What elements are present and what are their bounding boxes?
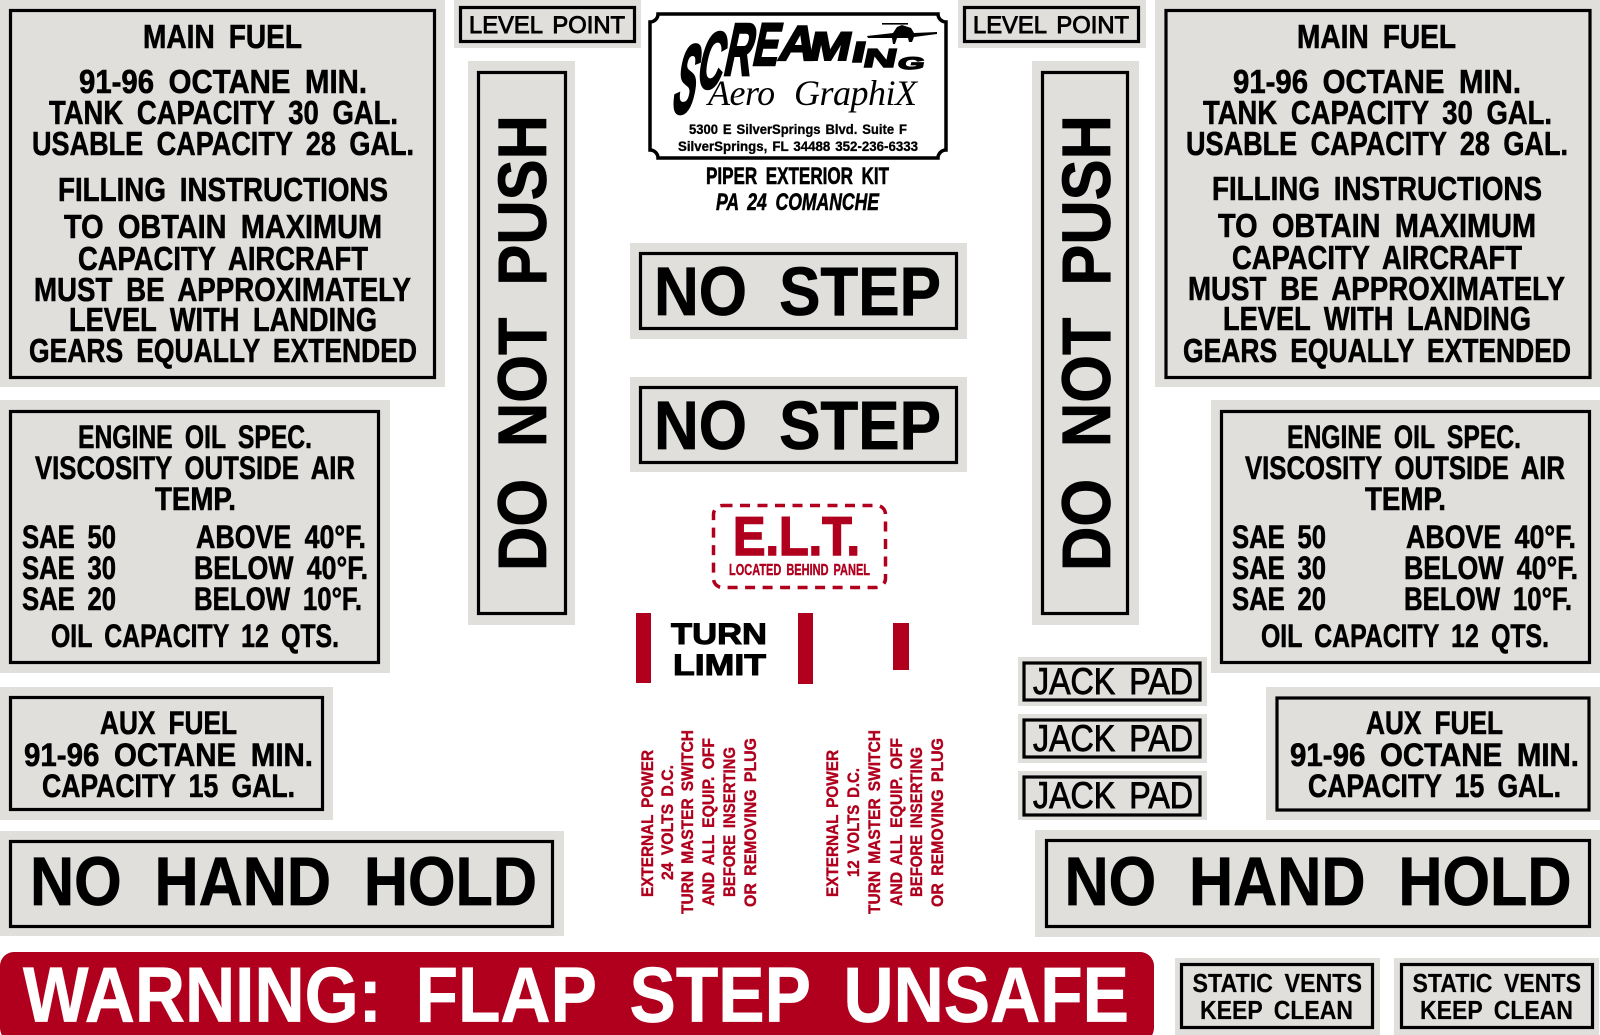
logo wordmark: screaming: M bbox=[805, 24, 856, 69]
heading: aux fuel: AUX FUEL bbox=[1366, 705, 1503, 741]
logo: screaming aero graphix bbox=[650, 8, 946, 158]
red short bar bbox=[893, 623, 909, 670]
placard: static vents 1 bbox=[1175, 958, 1380, 1035]
placard: jack pad 3: JACK PAD bbox=[1033, 775, 1193, 816]
fuel specification lines: 91-96 OCTANE MIN. bbox=[1233, 63, 1521, 100]
panel: main fuel right bbox=[1155, 0, 1600, 387]
logo wordmark: screaming: S bbox=[666, 25, 710, 134]
logo wordmark: screaming: E bbox=[748, 11, 788, 78]
placard: level point left bbox=[454, 0, 641, 48]
heading: engine oil spec: VISCOSITY OUTSIDE AIR bbox=[35, 450, 355, 486]
panel: aux fuel right bbox=[1266, 687, 1600, 820]
viscosity table bbox=[22, 519, 368, 617]
placard: level point right: LEVEL POINT bbox=[973, 12, 1129, 39]
placard: static vents 2: KEEP CLEAN bbox=[1420, 995, 1573, 1025]
external power 12 volts: BEFORE INSERTING bbox=[907, 747, 926, 897]
viscosity table: SAE 20 bbox=[22, 581, 116, 617]
logo frame bbox=[650, 14, 946, 158]
logo wordmark: screaming: C bbox=[691, 16, 735, 106]
placard: do not push left bbox=[468, 61, 575, 625]
placard: do not push left: DO NOT PUSH bbox=[484, 115, 561, 571]
logo wordmark: screaming bbox=[666, 8, 927, 134]
icon: airplane bbox=[867, 23, 937, 44]
logo wordmark: screaming: I bbox=[849, 36, 869, 68]
filling instruction lines: CAPACITY AIRCRAFT bbox=[78, 240, 368, 277]
filling instruction lines bbox=[1183, 207, 1571, 369]
logo wordmark: screaming: R bbox=[719, 8, 764, 91]
external power 12 volts bbox=[823, 730, 947, 914]
filling instruction lines: LEVEL WITH LANDING bbox=[1223, 300, 1531, 337]
external power 24 volts: AND ALL EQUIP. OFF bbox=[699, 738, 718, 906]
viscosity table: SAE 30 bbox=[1232, 550, 1326, 586]
fuel specification lines: TANK CAPACITY 30 GAL. bbox=[49, 94, 398, 131]
turn limit marker bbox=[636, 613, 813, 684]
filling instruction lines: MUST BE APPROXIMATELY bbox=[34, 271, 411, 308]
turn limit text: TURN bbox=[671, 618, 767, 651]
filling instruction lines: TO OBTAIN MAXIMUM bbox=[1218, 207, 1536, 244]
heading: filling instructions: FILLING INSTRUCTIONS bbox=[1212, 170, 1542, 207]
heading: engine oil spec: TEMP. bbox=[155, 481, 236, 517]
placard: no hand hold left bbox=[0, 831, 564, 936]
placard: no hand hold right bbox=[1035, 830, 1600, 937]
placard: no step lower: NO STEP bbox=[654, 387, 941, 464]
heading: main fuel: MAIN FUEL bbox=[143, 18, 302, 55]
placard: static vents 2 bbox=[1394, 958, 1599, 1035]
aux fuel lines bbox=[1290, 737, 1579, 804]
viscosity table: BELOW 10°F. bbox=[194, 581, 362, 617]
filling instruction lines: LEVEL WITH LANDING bbox=[69, 301, 377, 338]
external power 12 volts: AND ALL EQUIP. OFF bbox=[887, 738, 906, 906]
placard: level point left: LEVEL POINT bbox=[469, 12, 625, 39]
panel: engine oil left bbox=[0, 400, 390, 673]
placard: static vents 2: STATIC VENTS bbox=[1412, 968, 1581, 998]
elt letters: E.L.T. bbox=[733, 505, 860, 567]
external power 12 volts: 12 VOLTS D.C. bbox=[844, 768, 863, 877]
placard: static vents 1: KEEP CLEAN bbox=[1200, 995, 1353, 1025]
viscosity table: SAE 50 bbox=[22, 519, 116, 555]
aux fuel lines: 91-96 OCTANE MIN. bbox=[1290, 737, 1579, 773]
viscosity table: BELOW 40°F. bbox=[194, 550, 368, 586]
aux fuel lines: CAPACITY 15 GAL. bbox=[42, 768, 295, 804]
dashed frame bbox=[714, 506, 886, 588]
filling instruction lines: TO OBTAIN MAXIMUM bbox=[64, 208, 382, 245]
heading: engine oil spec bbox=[1245, 419, 1565, 517]
heading: main fuel: MAIN FUEL bbox=[1297, 18, 1456, 55]
heading: filling instructions: FILLING INSTRUCTIONS bbox=[58, 171, 388, 208]
red bar right bbox=[798, 613, 813, 684]
filling instruction lines: GEARS EQUALLY EXTENDED bbox=[29, 332, 417, 369]
placard: do not push right: DO NOT PUSH bbox=[1048, 115, 1125, 571]
heading: aux fuel: AUX FUEL bbox=[100, 705, 237, 741]
placard: no step upper: NO STEP bbox=[654, 253, 941, 330]
external power 24 volts: EXTERNAL POWER bbox=[638, 750, 657, 897]
panel: aux fuel left bbox=[0, 687, 333, 820]
placard: static vents 1: STATIC VENTS bbox=[1192, 968, 1362, 998]
logo script: aero graphix: Aero GraphiX bbox=[706, 73, 919, 113]
turn limit text bbox=[671, 618, 767, 682]
placard: jack pad 1: JACK PAD bbox=[1033, 661, 1193, 702]
placard: level point right bbox=[958, 0, 1146, 48]
external power 24 volts: TURN MASTER SWITCH bbox=[678, 730, 697, 914]
panel: main fuel left bbox=[0, 0, 445, 387]
external power 24 volts bbox=[638, 730, 760, 914]
logo address: 5300 E SilverSprings Blvd. Suite F bbox=[689, 122, 907, 137]
logo address: SilverSprings, FL 34488 352-236-6333 bbox=[678, 139, 918, 154]
placard: e.l.t. bbox=[714, 505, 886, 588]
filling instruction lines bbox=[29, 208, 417, 369]
placard: do not push right bbox=[1032, 61, 1139, 625]
external power 24 volts: BEFORE INSERTING bbox=[720, 747, 739, 897]
turn limit text: LIMIT bbox=[673, 649, 766, 682]
fuel specification lines: USABLE CAPACITY 28 GAL. bbox=[32, 125, 414, 162]
aux fuel lines: 91-96 OCTANE MIN. bbox=[24, 737, 313, 773]
heading: engine oil spec: ENGINE OIL SPEC. bbox=[1287, 419, 1521, 455]
aux fuel lines bbox=[24, 737, 313, 804]
viscosity table: SAE 20 bbox=[1232, 581, 1326, 617]
fuel specification lines bbox=[32, 63, 414, 162]
placard: no hand hold left: NO HAND HOLD bbox=[30, 843, 537, 920]
placard: jack pad 2: JACK PAD bbox=[1033, 718, 1193, 759]
external power 24 volts: OR REMOVING PLUG bbox=[741, 738, 760, 907]
external power 24 volts: 24 VOLTS D.C. bbox=[658, 765, 677, 880]
external power 12 volts: EXTERNAL POWER bbox=[823, 750, 842, 897]
heading: engine oil spec: ENGINE OIL SPEC. bbox=[78, 419, 312, 455]
oil capacity: OIL CAPACITY 12 QTS. bbox=[51, 618, 339, 654]
title: piper exterior kit: PIPER EXTERIOR KIT bbox=[706, 163, 889, 190]
external power 12 volts: OR REMOVING PLUG bbox=[928, 738, 947, 907]
located behind panel: LOCATED BEHIND PANEL bbox=[729, 562, 870, 579]
viscosity table: SAE 50 bbox=[1232, 519, 1326, 555]
subtitle: pa 24 comanche: PA 24 COMANCHE bbox=[716, 189, 880, 216]
filling instruction lines: CAPACITY AIRCRAFT bbox=[1232, 239, 1522, 276]
external power 12 volts: TURN MASTER SWITCH bbox=[865, 730, 884, 914]
logo address bbox=[678, 122, 918, 154]
viscosity table bbox=[1232, 519, 1578, 617]
red bar left bbox=[636, 613, 651, 683]
viscosity table: SAE 30 bbox=[22, 550, 116, 586]
logo wordmark: screaming: N bbox=[861, 43, 900, 73]
panel: engine oil right bbox=[1211, 400, 1600, 673]
fuel specification lines bbox=[1186, 63, 1568, 162]
heading: engine oil spec: TEMP. bbox=[1365, 481, 1446, 517]
fuel specification lines: 91-96 OCTANE MIN. bbox=[79, 63, 367, 100]
logo wordmark: screaming: A bbox=[775, 16, 822, 71]
heading: engine oil spec bbox=[35, 419, 355, 517]
viscosity table: ABOVE 40°F. bbox=[196, 519, 366, 555]
logo wordmark: screaming: G bbox=[896, 54, 927, 73]
